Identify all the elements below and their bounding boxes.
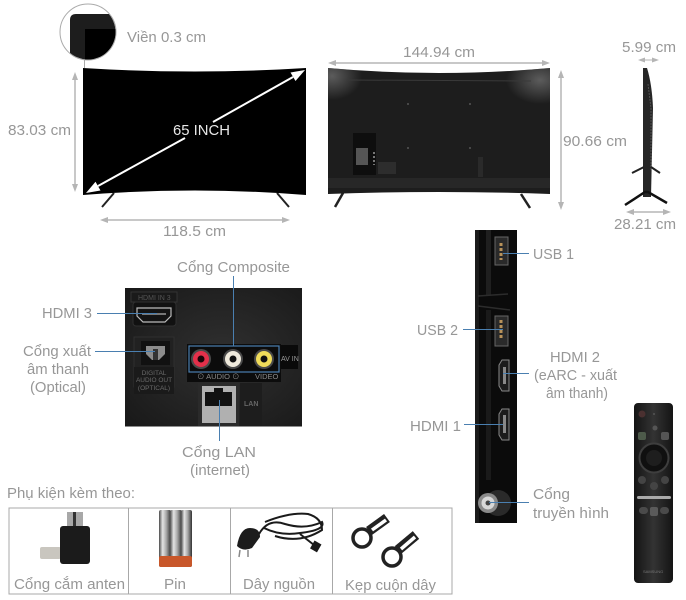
- label: cable clips: Kẹp cuộn dây: [345, 577, 436, 594]
- label: LAN port: Cổng LAN: [182, 444, 256, 461]
- panel: rear ports: [125, 288, 302, 426]
- label: HDMI 2: [534, 349, 618, 402]
- label: optical port: [23, 343, 92, 396]
- LAN port: [198, 383, 262, 426]
- label: total width: 144.94 cm: [403, 44, 475, 61]
- HDMI 3 port: HDMI IN 3: [138, 295, 171, 302]
- HDMI 3 port: [131, 292, 177, 326]
- label: optical port: âm thanh: [27, 361, 89, 378]
- label: front height: 83.03 cm: [8, 122, 71, 139]
- label: HDMI 3: HDMI 3: [42, 305, 92, 322]
- icon: cable clips: [353, 518, 416, 566]
- heading: accessories: Phụ kiện kèm theo:: [7, 485, 135, 502]
- label: bezel: Viền 0.3 cm: [127, 29, 206, 46]
- back view TV: [328, 68, 550, 209]
- USB 2 port: [495, 316, 508, 346]
- label: composite port: Cổng Composite: [177, 259, 290, 276]
- arrow: total height: [558, 70, 564, 210]
- label: antenna port: Cổng: [533, 486, 570, 503]
- optical port: (OPTICAL): [138, 385, 170, 392]
- optical port: [134, 337, 174, 394]
- label: LAN port: [182, 444, 256, 479]
- label: HDMI 2: âm thanh): [546, 385, 608, 402]
- label: antenna port: truyền hình: [533, 505, 609, 522]
- icon: bezel zoom circle: [60, 4, 120, 68]
- icon: antenna adapter: [40, 512, 90, 564]
- arrow: total width: [328, 60, 550, 66]
- label: optical port: Cổng xuất: [23, 343, 92, 360]
- pointer: USB 1: [503, 252, 529, 254]
- optical port: AUDIO OUT: [136, 377, 172, 384]
- pointer: optical: [95, 350, 155, 352]
- optical port: DIGITAL: [142, 370, 167, 377]
- composite AV ports: [187, 344, 299, 382]
- composite AV ports: ⊙ AUDIO ⊙: [197, 372, 240, 381]
- composite AV ports: VIDEO: [255, 372, 279, 381]
- remote control: [634, 403, 673, 583]
- label: USB 1: USB 1: [533, 246, 574, 263]
- pointer: HDMI 2: [503, 372, 529, 374]
- LAN port: LAN: [244, 401, 258, 408]
- pointer: antenna: [489, 502, 529, 504]
- icon: power cord: [237, 514, 323, 557]
- panel: side ports: [475, 230, 517, 523]
- label: HDMI 2: HDMI 2: [550, 349, 600, 366]
- arrow: depth: [638, 58, 659, 62]
- arrow: stand depth: [626, 209, 671, 215]
- front view TV: [83, 68, 306, 207]
- label: power cord: Dây nguồn: [243, 576, 315, 593]
- USB 1 port: [495, 237, 508, 265]
- remote control: SAMSUNG: [643, 569, 663, 574]
- label: batteries: Pin: [164, 576, 186, 593]
- pointer: LAN: [218, 400, 220, 441]
- label: LAN port: (internet): [190, 462, 250, 479]
- pointer: HDMI 3: [97, 312, 157, 314]
- side view TV: [625, 68, 667, 205]
- HDMI 1 port: [499, 409, 509, 440]
- label: antenna adapter: Cổng cắm anten: [14, 576, 125, 593]
- label: stand depth: 28.21 cm: [614, 216, 676, 233]
- arrow: screen diagonal: [86, 70, 305, 193]
- label: stand width: 118.5 cm: [163, 223, 226, 240]
- antenna port: [478, 490, 511, 516]
- pointer: HDMI 1: [464, 424, 503, 426]
- pointer: composite: [232, 276, 234, 346]
- label: antenna port: [533, 486, 609, 522]
- label: HDMI 1: HDMI 1: [410, 418, 461, 435]
- icon: batteries: [159, 510, 192, 567]
- label: depth: 5.99 cm: [622, 39, 676, 56]
- label: USB 2: USB 2: [417, 322, 458, 339]
- panel: accessories table: [9, 508, 452, 594]
- arrow: front height: [72, 72, 78, 192]
- label: screen size: 65 INCH: [173, 122, 230, 139]
- pointer: USB 2: [463, 328, 503, 330]
- HDMI 2 port: [499, 360, 509, 391]
- arrow: stand width: [100, 217, 290, 223]
- composite AV ports: AV IN: [281, 356, 299, 363]
- label: optical port: (Optical): [30, 379, 86, 396]
- label: total height: 90.66 cm: [563, 133, 627, 150]
- label: HDMI 2: (eARC - xuất: [534, 367, 618, 384]
